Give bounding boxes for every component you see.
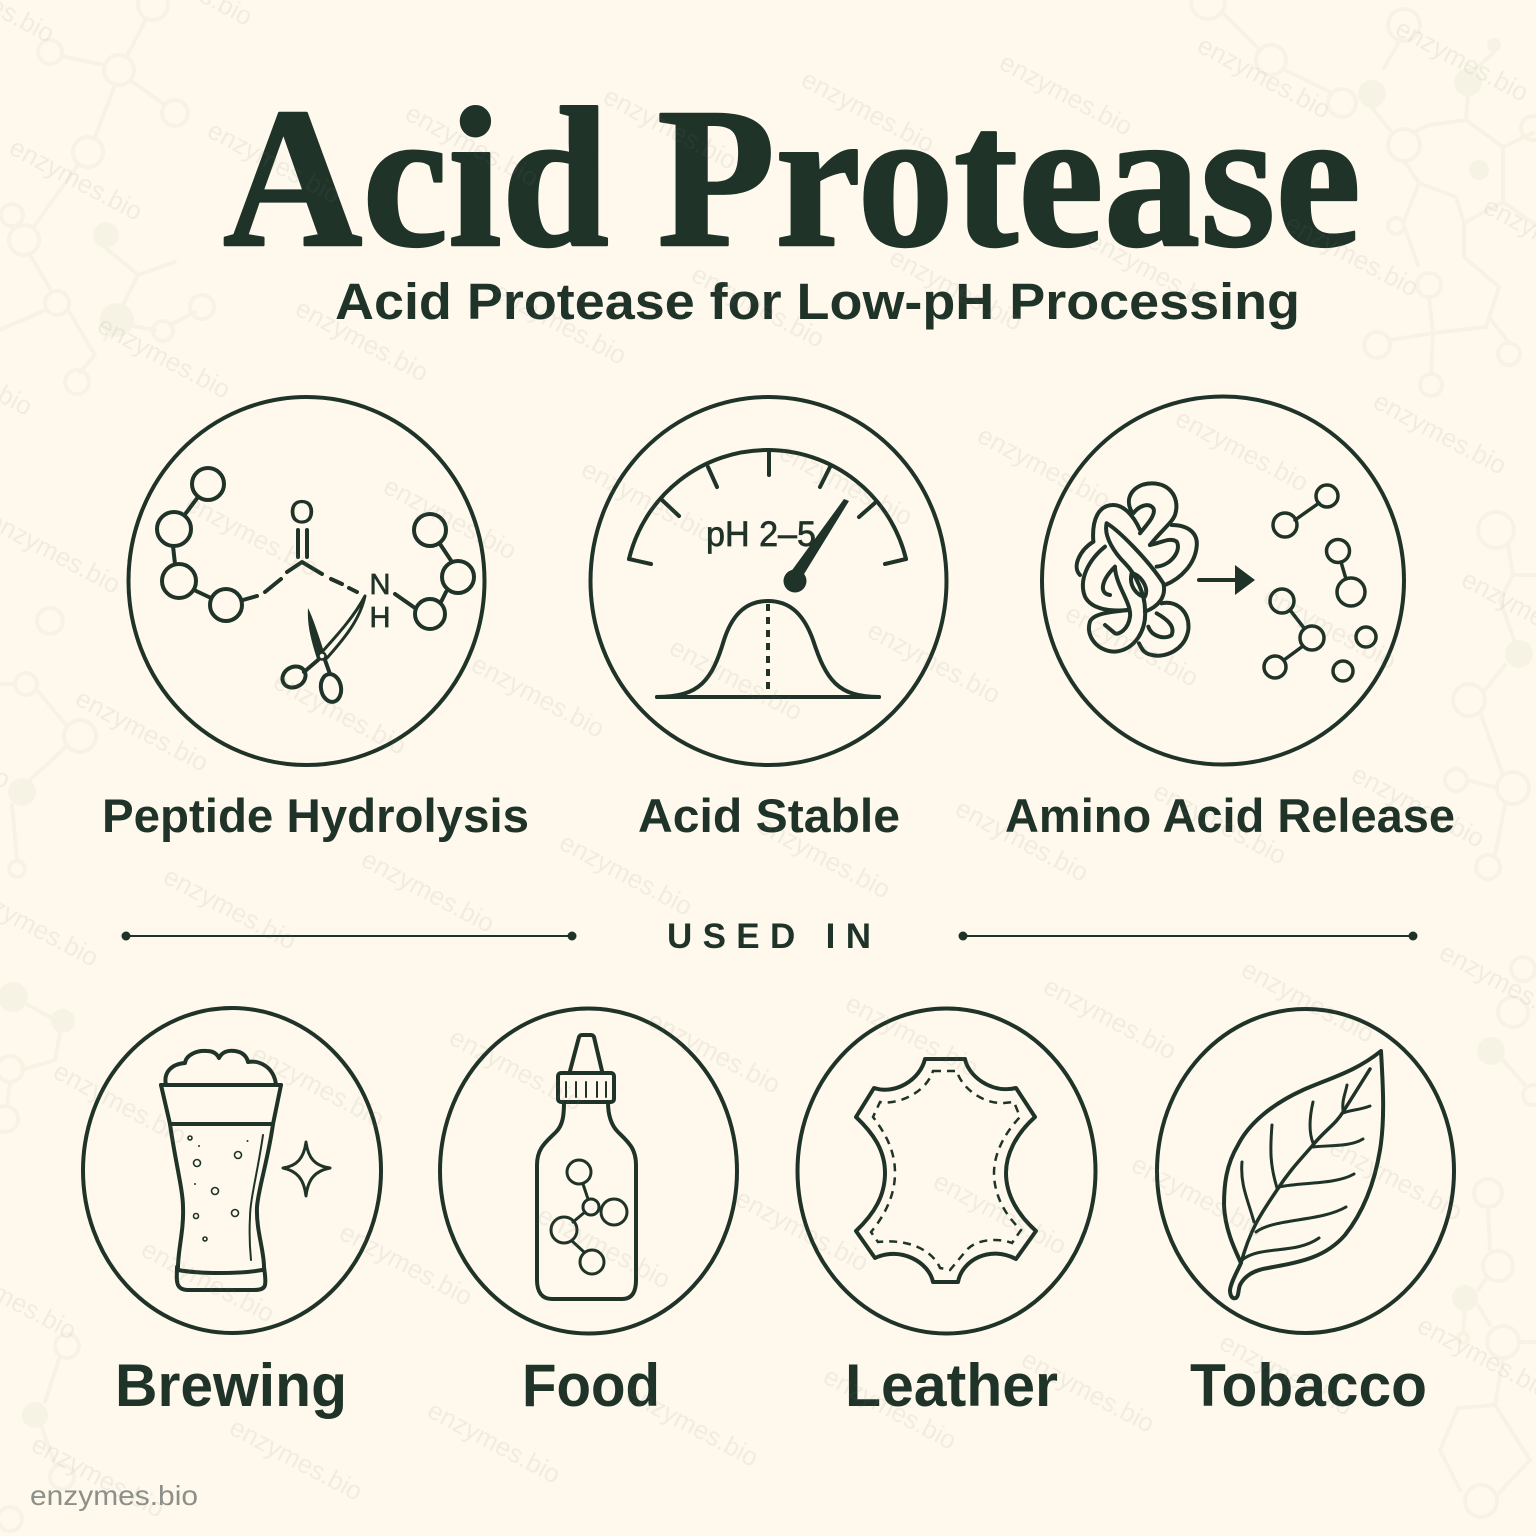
icon: beer glass with sparkle (161, 1051, 330, 1290)
text: enzymes.bio (401, 98, 544, 193)
text: enzymes.bio (291, 293, 434, 388)
text: enzymes.bio (423, 1395, 566, 1490)
text: enzymes.bio (247, 1039, 390, 1134)
text: enzymes.bio (731, 1183, 874, 1278)
text: enzymes.bio (973, 420, 1116, 515)
text: enzymes.bio (467, 649, 610, 744)
icon ring: brewing (83, 1008, 381, 1333)
icon: peptide bond with scissors: H (370, 602, 390, 634)
text: enzymes.bio (1039, 971, 1182, 1066)
icon: pH gauge and bell curve (629, 450, 906, 697)
arrow: protein to amino acids (1199, 565, 1255, 595)
text: enzymes.bio (1149, 776, 1292, 871)
icon: pH gauge and bell curve: pH 2–5 (706, 515, 816, 554)
text: enzymes.bio (489, 276, 632, 371)
section divider: used in (122, 917, 1418, 956)
panel: leather (798, 1008, 1096, 1334)
text: enzymes.bio (445, 1022, 588, 1117)
text: enzymes.bio (555, 827, 698, 922)
panel: brewing (83, 1008, 381, 1333)
panel: peptide hydrolysis (128, 397, 484, 765)
text: enzymes.bio (797, 64, 940, 159)
text: enzymes.bio (665, 632, 808, 727)
text: enzymes.bio (49, 1056, 192, 1151)
label: food: Food (522, 1352, 660, 1419)
text: enzymes.bio (621, 1378, 764, 1473)
title: Acid Protease (223, 68, 1361, 289)
text: enzymes.bio (599, 81, 742, 176)
text: enzymes.bio (335, 1217, 478, 1312)
text: enzymes.bio (1347, 759, 1490, 854)
label: leather: Leather (845, 1352, 1058, 1419)
text: enzymes.bio (951, 793, 1094, 888)
text: enzymes.bio (137, 1234, 280, 1329)
text: enzymes.bio (1259, 581, 1402, 676)
text: enzymes.bio (533, 1200, 676, 1295)
text: enzymes.bio (753, 810, 896, 905)
brand mark: enzymes.bio (30, 1480, 198, 1511)
panel: tobacco (1157, 1009, 1454, 1333)
text: enzymes.bio (159, 861, 302, 956)
icon: tobacco leaf (1224, 1051, 1383, 1298)
icon ring: food (440, 1008, 737, 1334)
text: enzymes.bio (819, 1361, 962, 1456)
icon: peptide bond with scissors: N (370, 569, 390, 601)
text: enzymes.bio (93, 310, 236, 405)
text: enzymes.bio (863, 615, 1006, 710)
text: enzymes.bio (1127, 1149, 1270, 1244)
text: enzymes.bio (841, 988, 984, 1083)
text: enzymes.bio (885, 242, 1028, 337)
label: brewing: Brewing (115, 1352, 347, 1419)
text: enzymes.bio (269, 666, 412, 761)
text: enzymes.bio (775, 437, 918, 532)
icon: folded protein (1077, 483, 1197, 656)
icon ring: acid stable (590, 397, 946, 765)
label: tobacco: Tobacco (1190, 1352, 1427, 1419)
text: enzymes.bio (1193, 30, 1336, 125)
text: enzymes.bio (1083, 225, 1226, 320)
panel: amino acid release (1042, 396, 1404, 764)
text: enzymes.bio (181, 488, 324, 583)
text: enzymes.bio (577, 454, 720, 549)
text: enzymes.bio (1369, 386, 1512, 481)
panel: acid stable (590, 397, 946, 765)
icon ring: peptide hydrolysis (128, 397, 484, 765)
text: enzymes.bio (1325, 1132, 1468, 1227)
label: acid stable: Acid Stable (638, 789, 900, 842)
text: enzymes.bio (1017, 1344, 1160, 1439)
text: enzymes.bio (379, 471, 522, 566)
icon ring: amino acid release (1042, 396, 1404, 764)
icon ring: tobacco (1157, 1009, 1454, 1333)
text: enzymes.bio (357, 844, 500, 939)
icon: leather hide (856, 1059, 1036, 1282)
icon: sauce bottle with molecule (537, 1035, 636, 1299)
panel: food (440, 1008, 737, 1334)
label: amino acid release: Amino Acid Release (1005, 789, 1455, 842)
icon ring: leather (798, 1008, 1096, 1334)
text: enzymes.bio (1281, 208, 1424, 303)
icon: released amino acids (1264, 485, 1376, 681)
text: enzymes.bio (27, 1429, 170, 1524)
text: enzymes.bio (1237, 954, 1380, 1049)
text: enzymes.bio (643, 1005, 786, 1100)
text: enzymes.bio (995, 47, 1138, 142)
text: enzymes.bio (929, 1166, 1072, 1261)
text: enzymes.bio (225, 1412, 368, 1507)
label: peptide hydrolysis: Peptide Hydrolysis (102, 789, 529, 842)
section divider: used in: USED IN (667, 917, 871, 956)
text: enzymes.bio (1391, 13, 1534, 108)
text: enzymes.bio (71, 683, 214, 778)
text: enzymes.bio (687, 259, 830, 354)
icon: peptide bond with scissors (157, 468, 474, 704)
text: enzymes.bio (5, 132, 148, 227)
subtitle: Acid Protease for Low-pH Processing (335, 273, 1300, 330)
icon: peptide bond with scissors: O (290, 494, 314, 530)
text: enzymes.bio (1061, 598, 1204, 693)
text: enzymes.bio (203, 115, 346, 210)
text: enzymes.bio (1171, 403, 1314, 498)
text: enzymes.bio (1215, 1327, 1358, 1422)
